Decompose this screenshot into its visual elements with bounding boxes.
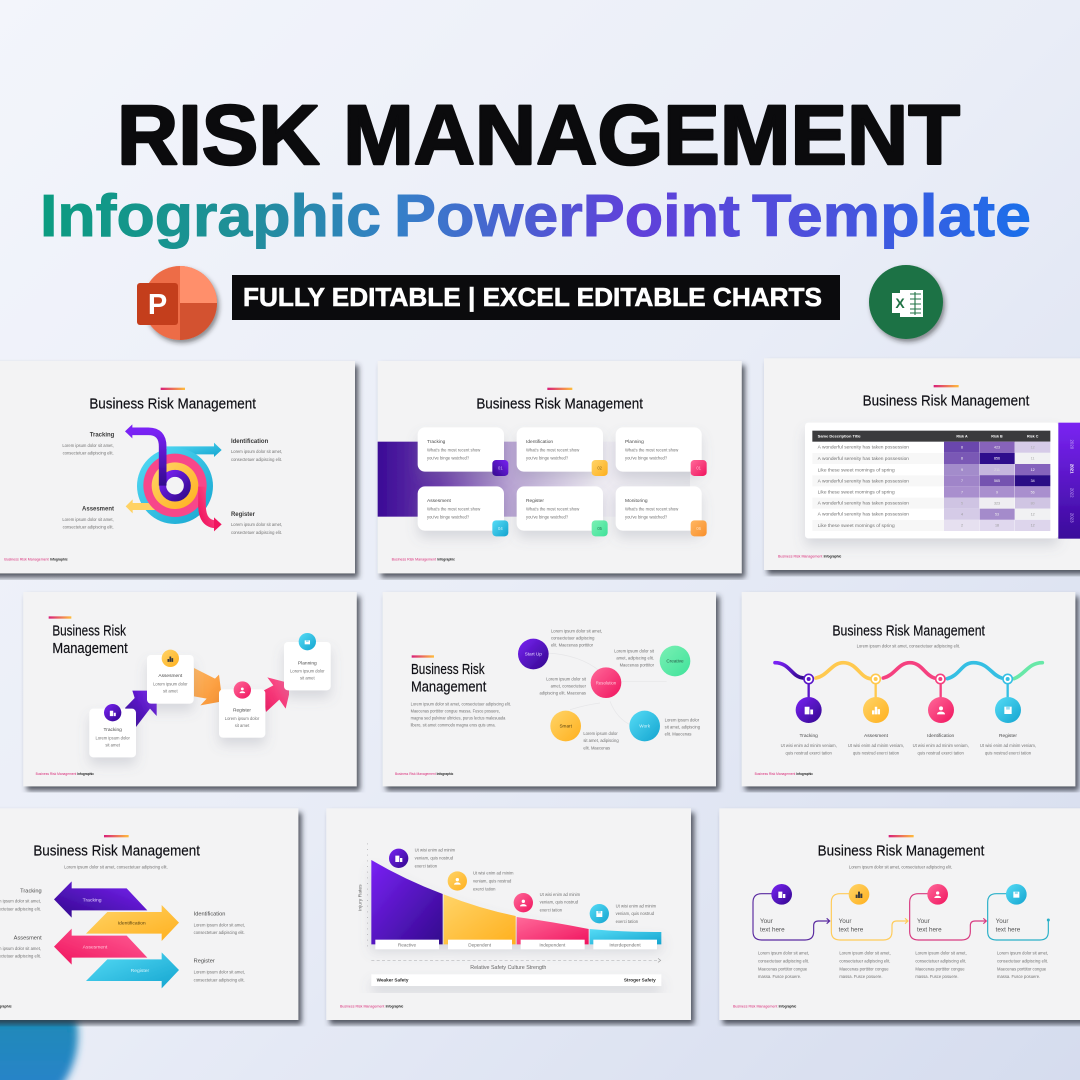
- callout: cyan: veniam, quis nostrud: [616, 911, 655, 916]
- subtitle: PowerPoint: [394, 183, 740, 249]
- slide 8: safety culture area chart: Business Risk Management: [340, 1005, 384, 1009]
- card: Tracking: [418, 427, 508, 476]
- table: 5: [961, 501, 963, 505]
- labels: [0, 888, 245, 982]
- slide 2: six cards: Business Risk Management: [392, 558, 436, 562]
- bubble captions: Lorem ipsum dolor sit amet,: [551, 628, 602, 633]
- card: Register: What's the most recent show: [526, 506, 580, 511]
- year sidebar: 2023: [1069, 513, 1074, 523]
- slide 2: six cards: Business Risk Management: [476, 396, 643, 412]
- card: Monitoring: 06: [696, 526, 702, 531]
- step 1: massa. Fusce posuere.: [758, 974, 801, 979]
- title: RISK MANAGEMENT: [117, 88, 960, 182]
- bubble: Creative: Creative: [666, 659, 684, 664]
- step: Tracking: Ut wisi enim ad minim veniam,: [781, 743, 837, 748]
- step 4: [988, 884, 1050, 979]
- subtitle: Infographic: [40, 183, 381, 249]
- slide 5: bubble network: [383, 592, 716, 786]
- arrow: pink: [262, 677, 289, 712]
- table: 7: [961, 490, 963, 494]
- callout: pink: [514, 892, 581, 913]
- card: Planning: [616, 427, 707, 476]
- safety scale: Stroger Safety: [624, 978, 656, 983]
- slide 1: concentric arrows: Business Risk Management: [4, 558, 49, 562]
- step: Assesment: Assesment: [864, 733, 889, 739]
- table: 12: [1031, 513, 1035, 517]
- slide 5: bubble network: Business Risk Management: [395, 772, 436, 776]
- slide 6: wave timeline: [742, 592, 1075, 786]
- slide 4: stepped cards with arrows: Business Risk: [52, 624, 127, 640]
- bubble captions: elit. Maecenas porttitor: [551, 643, 594, 648]
- label: Assesment: [62, 507, 114, 530]
- card: Register: sit amet: [235, 723, 250, 728]
- card: Planning: Lorem ipsum dolor: [290, 669, 325, 674]
- card: Register: Register: [233, 708, 251, 714]
- table: 4: [961, 513, 963, 517]
- labels: consectetuer adipiscing elit.: [194, 977, 245, 982]
- step 2: Your: [839, 918, 851, 925]
- bubble: Resolution: [591, 667, 621, 698]
- label: Assesment: consectetuer adipiscing elit.: [63, 525, 114, 530]
- slide 3: heat table: [764, 358, 1080, 570]
- bubble captions: sit amet, adipiscing: [665, 724, 701, 729]
- callout: purple: exerci tation: [415, 864, 438, 869]
- step: Tracking: quis nostrud exerci tation: [786, 750, 832, 755]
- table: 7: [961, 479, 963, 483]
- bubble captions: amet, consectetuer: [551, 683, 587, 688]
- slide 4: stepped cards with arrows: [23, 592, 357, 786]
- table: 9: [961, 468, 963, 472]
- callout: yellow: [448, 870, 514, 891]
- callout: purple: veniam, quis nostrud: [415, 855, 454, 860]
- slide 6: wave timeline: Business Risk Management: [755, 772, 795, 776]
- card: Assesment: 04: [498, 526, 503, 531]
- paragraph: magna sed pulvinar ultricies, purus lectus malesuada: [411, 716, 506, 721]
- step 2: text here: [839, 927, 864, 934]
- table: 56: [1031, 490, 1035, 494]
- card: Monitoring: [616, 486, 707, 536]
- bubble: Work: Work: [639, 724, 651, 729]
- slide 8: safety culture area chart: [326, 808, 691, 1020]
- year sidebar: 2021: [1069, 464, 1074, 474]
- step 4: text here: [996, 927, 1021, 934]
- arrow: Register: Register: [131, 968, 150, 974]
- banner: FULLY EDITABLE | EXCEL EDITABLE CHARTS: [243, 282, 822, 312]
- table: Risk A: [956, 434, 968, 438]
- bubble captions: elit. Maecenas: [665, 732, 691, 737]
- paragraph: Lorem ipsum dolor sit amet, consectetuer adipiscing elit.: [411, 701, 511, 706]
- bubble: Start Up: Start Up: [525, 652, 542, 657]
- callout: yellow: exerci tation: [473, 886, 496, 891]
- stage labels: Independent: [539, 942, 566, 947]
- step: Register: Ut wisi enim ad minim veniam,: [980, 743, 1036, 748]
- labels: Lorem ipsum dolor sit amet,: [194, 922, 245, 927]
- card: Tracking: Tracking: [103, 727, 122, 733]
- card: Planning: 01: [696, 466, 702, 471]
- bubble captions: sit amet, adipiscing: [583, 738, 619, 743]
- callout: pink: Ut wisi enim ad minim: [540, 892, 581, 897]
- label: Identification: Identification: [231, 439, 269, 445]
- table: 423: [994, 446, 1000, 450]
- card: Assesment: Assesment: [158, 673, 183, 679]
- card: Assesment: sit amet: [163, 689, 178, 694]
- step 4: Your: [996, 918, 1008, 925]
- table: 12: [1031, 524, 1035, 528]
- step: Assesment: [848, 674, 904, 755]
- callout: cyan: [590, 903, 657, 924]
- callout: pink: exerci tation: [540, 908, 563, 913]
- step 2: Maecenas porttitor congue: [839, 966, 889, 971]
- table: 9: [996, 490, 998, 494]
- step 3: Your: [917, 918, 930, 925]
- step 1: text here: [760, 927, 785, 934]
- step 1: Your: [760, 918, 773, 925]
- icon: Excel: X: [895, 295, 905, 311]
- callout: cyan: Ut wisi enim ad minim: [616, 903, 657, 908]
- table: Same Description Title: [818, 434, 861, 438]
- card: Tracking: Tracking: [427, 439, 446, 445]
- label: Tracking: [62, 432, 115, 456]
- table: [805, 423, 1058, 538]
- table: 34: [1031, 479, 1035, 483]
- bubble: Resolution: Resolution: [596, 680, 617, 685]
- slide 6: wave timeline: Business Risk Management: [832, 624, 985, 640]
- card: Tracking: Lorem ipsum dolor: [95, 736, 130, 741]
- card: Monitoring: Monitoring: [625, 498, 648, 504]
- card: Register: [517, 486, 608, 536]
- bubble captions: Lorem ipsum dolor sit: [546, 676, 587, 681]
- y axis: [358, 843, 367, 949]
- slide 3: heat table: Infographic: [824, 555, 841, 559]
- label: Tracking: consectetuer adipiscing elit.: [63, 451, 114, 456]
- slide 9: connected steps: Business Risk Management: [818, 844, 984, 860]
- step 4: Lorem ipsum dolor sit amet,: [997, 951, 1048, 956]
- labels: Register: [194, 959, 215, 965]
- card: Identification: you've binge watched?: [526, 455, 569, 460]
- subtitle: [40, 183, 1031, 249]
- table: Like these sweet mornings of spring: [818, 489, 895, 494]
- year sidebar: [1058, 423, 1080, 539]
- table: Like these sweet mornings of spring: [818, 467, 895, 472]
- table: 8: [961, 446, 963, 450]
- slide 5: bubble network: Infographic: [437, 772, 453, 776]
- label: Tracking: Tracking: [90, 432, 115, 438]
- card: Planning: What's the most recent show: [625, 447, 679, 452]
- slide 9: connected steps: [719, 808, 1080, 1020]
- step 2: massa. Fusce posuere.: [839, 974, 883, 979]
- callout: yellow: veniam, quis nostrud: [473, 878, 512, 883]
- card: Assesment: [147, 650, 194, 704]
- slide 2: six cards: [378, 361, 742, 573]
- bubble: Start Up: [518, 639, 549, 669]
- card: Monitoring: you've binge watched?: [625, 514, 668, 519]
- label: Register: Register: [231, 512, 256, 518]
- bubble captions: adipiscing elit. Maecenas: [540, 691, 586, 696]
- callout: yellow: Ut wisi enim ad minim: [473, 870, 514, 875]
- slide 4: stepped cards with arrows: Management: [52, 641, 128, 657]
- table: 18: [995, 524, 999, 528]
- label: Assesment: Assesment: [82, 507, 114, 513]
- slide 1: concentric arrows: Infographic: [50, 558, 68, 562]
- paragraph: [411, 701, 511, 728]
- arrow: Identification: Identification: [118, 921, 146, 927]
- slide 7: interlocking arrows: Business Risk Management: [33, 844, 200, 860]
- callout: purple: [389, 848, 456, 869]
- bubble: Work: [629, 711, 660, 741]
- table: 12: [1031, 468, 1035, 472]
- stage labels: Reactive: [398, 942, 416, 947]
- bubble: Smart: Smart: [559, 724, 573, 729]
- card: Register: 05: [597, 526, 603, 531]
- slide 1: concentric arrows: Business Risk Management: [89, 396, 256, 412]
- slide 9: connected steps: Lorem ipsum dolor sit amet, consectetuer adipiscing elit.: [849, 864, 952, 869]
- slide 1: concentric arrows: [0, 361, 355, 573]
- table: 2: [961, 524, 963, 528]
- card: Register: Lorem ipsum dolor: [225, 716, 260, 721]
- table: 12: [1031, 446, 1035, 450]
- card: Tracking: [89, 704, 136, 757]
- slide 4: stepped cards with arrows: Business Risk Management: [36, 772, 76, 776]
- slide 3: heat table: Business Risk Management: [863, 394, 1029, 410]
- labels: consectetuer adipiscing elit.: [194, 930, 245, 935]
- slide 6: wave timeline: Infographic: [796, 772, 813, 776]
- step: Register: [980, 674, 1036, 755]
- slide 5: bubble network: Management: [411, 679, 486, 695]
- card: Planning: sit amet: [300, 676, 315, 681]
- slide 3: heat table: Business Risk Management: [778, 555, 822, 559]
- arrow: Assesment: Assesment: [83, 944, 108, 950]
- card: Planning: you've binge watched?: [625, 455, 668, 460]
- step 1: Maecenas porttitor congue: [758, 966, 808, 971]
- step 1: Lorem ipsum dolor sit amet,: [758, 951, 809, 956]
- step 3: Lorem ipsum dolor sit amet,: [915, 951, 967, 956]
- card: Monitoring: What's the most recent show: [625, 506, 679, 511]
- arrow: Assesment: [54, 929, 147, 965]
- card: Identification: 02: [597, 466, 603, 471]
- arrow: Register: [86, 952, 179, 988]
- label: Identification: Lorem ipsum dolor sit amet,: [231, 449, 282, 454]
- table: A wonderful serenity has taken possession: [818, 501, 910, 506]
- bubble captions: [540, 628, 701, 750]
- card: Assesment: Assesment: [427, 498, 452, 504]
- card: Assesment: [418, 486, 508, 536]
- card: Tracking: What's the most recent show: [427, 447, 481, 452]
- card: Register: Register: [526, 498, 544, 504]
- label: Identification: consectetuer adipiscing elit.: [231, 457, 282, 462]
- safety scale: [371, 974, 661, 986]
- bubble captions: Lorem ipsum dolor: [665, 717, 700, 722]
- step: Identification: quis nostrud exerci tation: [918, 750, 964, 755]
- labels: Lorem ipsum dolor sit amet,: [194, 969, 245, 974]
- arrow: Tracking: [54, 881, 147, 918]
- arrow: Tracking: Tracking: [83, 897, 102, 903]
- bubble captions: Lorem ipsum dolor: [583, 731, 618, 736]
- callout: pink: veniam, quis nostrud: [540, 900, 579, 905]
- slide 2: six cards: Infographic: [437, 558, 455, 562]
- safety scale: Weaker Safety: [377, 978, 409, 983]
- step: Identification: Ut wisi enim ad minim veniam,: [913, 743, 969, 748]
- table: 8: [961, 457, 963, 461]
- table: 11: [1031, 457, 1035, 461]
- step 4: massa. Fusce posuere.: [997, 974, 1040, 979]
- step 2: Lorem ipsum dolor sit amet,: [839, 951, 891, 956]
- card: Planning: [284, 633, 331, 690]
- table: A wonderful serenity has taken possession: [818, 456, 910, 461]
- arrow: orange: [194, 668, 222, 705]
- step: Identification: [913, 674, 969, 755]
- step 4: Maecenas porttitor congue: [997, 966, 1047, 971]
- decorative blue circle, bottom left: [0, 947, 78, 1080]
- label: Assesment: Lorem ipsum dolor sit amet,: [62, 517, 114, 522]
- table: A wonderful serenity has taken possession: [818, 445, 910, 450]
- card: Identification: Identification: [526, 439, 553, 445]
- callout: purple: Ut wisi enim ad minim: [415, 848, 456, 853]
- arrow diagram: [125, 424, 222, 531]
- step 2: [831, 884, 908, 979]
- table: 323: [994, 501, 1000, 505]
- label: Tracking: Lorem ipsum dolor sit amet,: [62, 443, 114, 448]
- card: Register: [219, 681, 265, 738]
- step: Tracking: Tracking: [799, 733, 818, 739]
- slide 9: connected steps: Business Risk Management: [733, 1005, 777, 1009]
- year sidebar: 2020: [1069, 440, 1074, 450]
- card: Identification: [517, 427, 608, 476]
- x axis: Relative Safety Culture Strength: [470, 965, 546, 971]
- table: 53: [995, 513, 999, 517]
- bubble captions: amet, adipiscing elit.: [616, 655, 654, 660]
- step 3: [910, 884, 986, 979]
- table: Like these sweet mornings of spring: [818, 523, 895, 528]
- step: Assesment: Ut wisi enim ad minim veniam,: [848, 743, 904, 748]
- stage labels: Dependent: [468, 942, 492, 947]
- slide 4: stepped cards with arrows: Infographic: [77, 772, 94, 776]
- arrow: Identification: [86, 905, 179, 941]
- table: A wonderful serenity has taken possession: [818, 478, 910, 483]
- card: Assesment: Lorem ipsum dolor: [153, 681, 188, 686]
- bubble captions: elit. Maecenas: [583, 745, 610, 750]
- labels: Identification: [194, 912, 225, 918]
- bubble: Creative: [660, 646, 690, 676]
- icon: PowerPoint: P: [148, 289, 167, 321]
- step 3: massa. Fusce posuere.: [915, 974, 959, 979]
- card: Planning: Planning: [298, 660, 317, 666]
- bubble: Smart: [550, 711, 581, 741]
- icon: PowerPoint: [137, 266, 217, 340]
- step: Register: Register: [999, 733, 1017, 739]
- card: Planning: Planning: [625, 439, 644, 445]
- step 2: consectetuer adipiscing elit.: [839, 958, 890, 963]
- table: A wonderful serenity has taken possession: [818, 512, 910, 517]
- step 4: consectetuer adipiscing elit.: [997, 958, 1048, 963]
- slide 7: interlocking arrows: Lorem ipsum dolor sit amet, consectetuer adipiscing elit.: [64, 864, 168, 869]
- banner: [232, 275, 840, 320]
- step: Tracking: [781, 674, 837, 755]
- step: Identification: Identification: [927, 733, 955, 739]
- table: 80: [1031, 501, 1035, 505]
- card: Identification: What's the most recent show: [526, 447, 580, 452]
- table: Risk B: [991, 434, 1003, 438]
- label: Register: consectetuer adipiscing elit.: [231, 530, 282, 535]
- label: Register: [231, 512, 282, 535]
- table: 856: [994, 457, 1000, 461]
- table: 565: [994, 479, 1000, 483]
- label: Identification: [231, 439, 282, 462]
- label: Register: Lorem ipsum dolor sit amet,: [231, 522, 282, 527]
- slide 5: bubble network: Business Risk: [411, 662, 485, 678]
- arrow: purple: [125, 691, 157, 727]
- step 3: text here: [917, 927, 942, 934]
- stage labels: [375, 940, 657, 949]
- table: Risk C: [1027, 434, 1039, 438]
- card: Register: you've binge watched?: [526, 514, 569, 519]
- card: Tracking: 01: [498, 466, 503, 471]
- slide 9: connected steps: Infographic: [779, 1005, 796, 1009]
- step 3: consectetuer adipiscing elit.: [915, 958, 966, 963]
- icon: Excel: [869, 265, 943, 339]
- step 3: Maecenas porttitor congue: [915, 966, 965, 971]
- step 1: consectetuer adipiscing elit.: [758, 958, 809, 963]
- bubble captions: Maecenas porttitor: [620, 663, 655, 668]
- table: 211: [994, 468, 1000, 472]
- year sidebar: 2022: [1069, 488, 1074, 498]
- step: Assesment: quis nostrud exerci tation: [853, 750, 900, 755]
- area chart: [371, 860, 661, 944]
- bubble captions: Lorem ipsum dolor sit: [614, 648, 655, 653]
- card: Assesment: you've binge watched?: [427, 514, 470, 519]
- callout: cyan: exerci tation: [616, 919, 639, 924]
- card: Tracking: sit amet: [105, 743, 121, 748]
- paragraph: Maecenas porttitor congue massa. Fusce posuere,: [411, 708, 500, 713]
- paragraph: libero, sit amet commodo magna eros quis urna.: [411, 723, 496, 728]
- wave line: [775, 663, 1042, 679]
- slide 8: safety culture area chart: Infographic: [386, 1005, 403, 1009]
- bubble captions: consectetuer adipiscing: [551, 635, 595, 640]
- slide 7: interlocking arrows: [0, 808, 298, 1020]
- labels: Assesment: [14, 935, 42, 941]
- step: Register: quis nostrud exerci tation: [985, 750, 1032, 755]
- step 1: [753, 884, 830, 979]
- stage labels: Interdependent: [609, 942, 641, 947]
- labels: Tracking: [20, 888, 42, 894]
- y axis: Injury Rates: [358, 884, 364, 911]
- card: Assesment: What's the most recent show: [427, 506, 481, 511]
- slide 6: wave timeline: Lorem ipsum dolor sit amet, consectetuer adipiscing elit.: [857, 643, 960, 648]
- card: Tracking: you've binge watched?: [427, 455, 470, 460]
- subtitle: Template: [752, 183, 1031, 249]
